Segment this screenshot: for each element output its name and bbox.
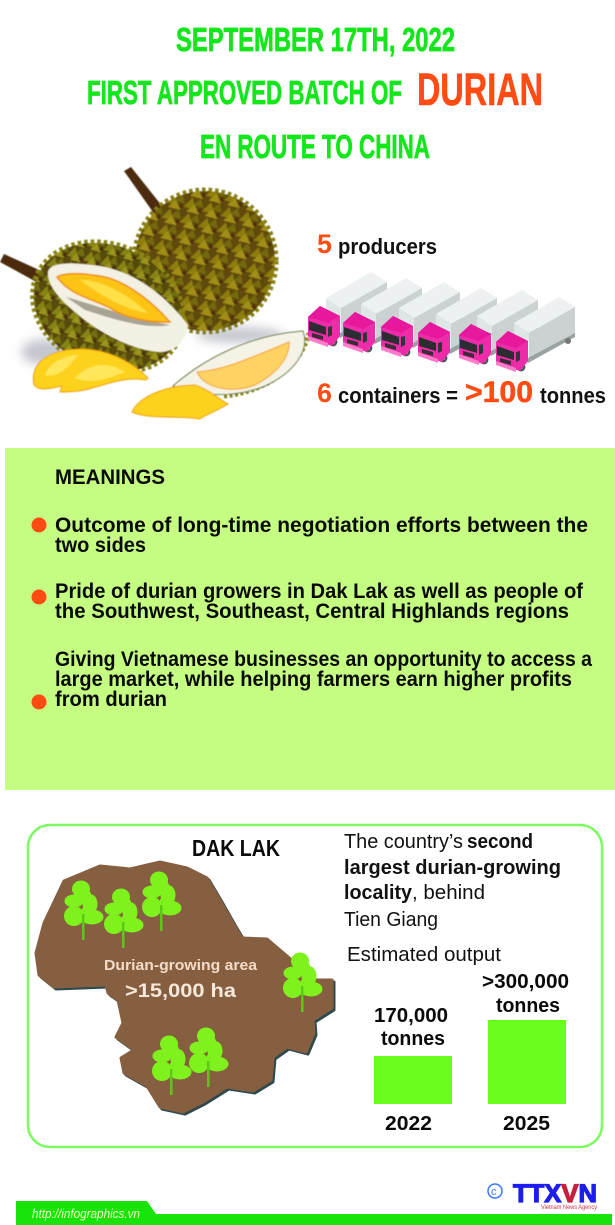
stat: producers xyxy=(317,229,437,259)
bar chart: estimated output: 2022 xyxy=(385,1113,432,1135)
bullet 1: two sides xyxy=(55,533,146,557)
stat: producers: 5 xyxy=(317,229,332,259)
title: SEPTEMBER 17TH, 2022 xyxy=(176,21,455,58)
text: locality description: Tien Giang xyxy=(344,909,438,931)
bar chart: estimated output xyxy=(347,944,569,1135)
bar chart: estimated output: 2025 xyxy=(503,1113,550,1135)
title xyxy=(87,21,543,165)
logo: TTXVN: Vietnam News Agency xyxy=(541,1205,597,1211)
bullet 1: Outcome of long-time negotiation efforts between the xyxy=(55,513,588,537)
bar chart: estimated output: Estimated output xyxy=(347,944,501,966)
footer band with url xyxy=(16,1201,612,1225)
bar chart: estimated output: tonnes xyxy=(496,995,560,1017)
text: locality description: locality xyxy=(344,882,413,904)
stat: containers and tonnes: >100 xyxy=(465,376,533,409)
text: locality description: , behind xyxy=(412,882,485,904)
illustration: durian fruits xyxy=(0,167,309,419)
bullet 2: the Southwest, Southeast, Central Highlands regions xyxy=(55,599,569,623)
stat: containers and tonnes: tonnes xyxy=(540,383,606,408)
logo: TTXVN: TTXVN xyxy=(513,1180,597,1208)
logo: TTXVN: c xyxy=(491,1186,497,1198)
title: EN ROUTE TO CHINA xyxy=(200,128,430,165)
bullet 2 xyxy=(32,579,584,623)
text: locality description: second xyxy=(467,831,533,853)
logo: TTXVN xyxy=(488,1180,597,1211)
icon: six container trucks xyxy=(308,272,575,372)
title: FIRST APPROVED BATCH OF xyxy=(87,74,402,111)
footer band with url: http://infographics.vn xyxy=(32,1206,140,1221)
bullet 2: Pride of durian growers in Dak Lak as well as people of xyxy=(55,579,584,603)
map of Dak Lak xyxy=(36,862,334,1114)
bar chart: estimated output: >300,000 xyxy=(482,971,569,993)
text: locality description xyxy=(344,831,561,931)
text: locality description: The country’s xyxy=(344,831,463,853)
bar chart: estimated output: 170,000 xyxy=(374,1005,448,1027)
bullet 3 xyxy=(32,647,593,711)
heading: meanings: MEANINGS xyxy=(55,465,165,489)
stat: containers and tonnes: containers = xyxy=(338,383,458,408)
stat: containers and tonnes: 6 xyxy=(317,378,332,408)
title: DURIAN xyxy=(417,64,543,115)
bullet 3: from durian xyxy=(55,687,167,711)
panel: Dak Lak xyxy=(28,825,602,1147)
panel: meanings xyxy=(5,448,615,790)
text: locality description: largest durian-growing xyxy=(344,857,561,879)
stat: containers and tonnes xyxy=(317,376,606,409)
stat: producers: producers xyxy=(338,234,437,259)
map label: durian-growing area: Durian-growing area xyxy=(104,957,258,974)
bullet 1 xyxy=(32,513,588,557)
bullet 3: large market, while helping farmers earn higher profits xyxy=(55,667,572,691)
heading: Dak Lak: DAK LAK xyxy=(192,835,280,861)
bar chart: estimated output: tonnes xyxy=(381,1028,445,1050)
icon: durian trees xyxy=(64,872,322,1095)
map value: area: >15,000 ha xyxy=(125,981,236,1002)
